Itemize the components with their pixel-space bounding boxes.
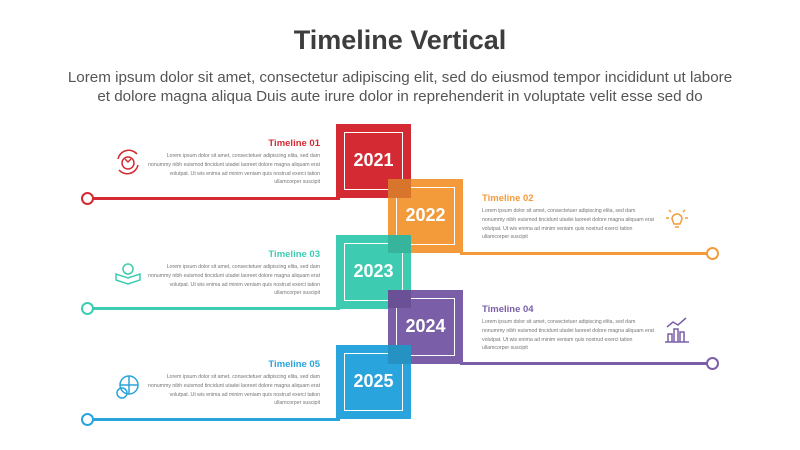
text: timeline 04: Lorem ipsum dolor sit amet, consectetuer adipiscing elita, sed dam nonummy nibh euismod tincidunt utadei laoreet dolore magna aliquam erat volutpat. Ut wis enima ad minim veniam quis nostrud exerci tation ullamcorper suscipit (482, 319, 654, 351)
text: timeline 05: Lorem ipsum dolor sit amet, consectetuer adipiscing elita, sed dam nonummy nibh euismod tincidunt utadei laoreet dolore magna aliquam erat volutpat. Ut wis enima ad minim veniam quis nostrud exerci tation ullamcorper suscipit (148, 374, 320, 406)
text: timeline 04: Timeline 04 (482, 304, 534, 315)
line 1 (90, 197, 340, 200)
box 2023: 2023 (353, 261, 394, 281)
line 5 (90, 418, 340, 421)
text: timeline 03: Timeline 03 (268, 249, 320, 260)
line 3 (90, 307, 340, 310)
icon: lightbulb (666, 210, 688, 228)
text: timeline 04 (482, 304, 654, 351)
box 2024: 2024 (405, 316, 446, 336)
title: Timeline Vertical (294, 25, 506, 55)
box 2025: 2025 (353, 371, 394, 391)
line 4 (460, 362, 708, 365)
box 2022: 2022 (405, 205, 446, 225)
text: timeline 05: Timeline 05 (268, 359, 320, 370)
text: timeline 05 (148, 359, 320, 406)
text: timeline 02: Timeline 02 (482, 193, 534, 204)
subtitle: Lorem ipsum dolor sit amet, consectetur adipiscing elit, sed do eiusmod tempor incididunt ut labore (68, 69, 732, 86)
text: timeline 02: Lorem ipsum dolor sit amet, consectetuer adipiscing elita, sed dam nonummy nibh euismod tincidunt utadei laoreet dolore magna aliquam erat volutpat. Ut wis enima ad minim veniam quis nostrud exerci tation ullamcorper suscipit (482, 208, 654, 240)
icon: money globe (116, 375, 139, 399)
line 2 (460, 252, 708, 255)
text: timeline 03: Lorem ipsum dolor sit amet, consectetuer adipiscing elita, sed dam nonummy nibh euismod tincidunt utadei laoreet dolore magna aliquam erat volutpat. Ut wis enima ad minim veniam quis nostrud exerci tation ullamcorper suscipit (148, 264, 320, 296)
dot 5 (81, 413, 94, 426)
box 2023 (336, 235, 411, 309)
icon: book (115, 263, 141, 285)
dot 4 (706, 357, 719, 370)
text: timeline 01: Lorem ipsum dolor sit amet, consectetuer adipiscing elita, sed dam nonummy nibh euismod tincidunt utadei laoreet dolore magna aliquam erat volutpat. Ut wis enima ad minim veniam quis nostrud exerci tation ullamcorper suscipit (148, 153, 320, 185)
icon: recycle (117, 150, 139, 174)
box 2021: 2021 (353, 150, 394, 170)
box 2024 (388, 290, 463, 364)
dot 3 (81, 302, 94, 315)
dot 1 (81, 192, 94, 205)
box 2022 (388, 179, 463, 253)
text: timeline 03 (148, 249, 320, 296)
dot 2 (706, 247, 719, 260)
box 2025 (336, 345, 411, 419)
subtitle: et dolore magna aliqua Duis aute irure dolor in reprehenderit in voluptate velit esse sed do (97, 88, 703, 105)
text: timeline 01 (148, 138, 320, 185)
text: timeline 02 (482, 193, 654, 240)
icon: chart (665, 318, 689, 343)
overlap shades (388, 179, 411, 198)
text: timeline 01: Timeline 01 (268, 138, 320, 149)
box 2021 (336, 124, 411, 198)
subtitle (68, 69, 732, 105)
